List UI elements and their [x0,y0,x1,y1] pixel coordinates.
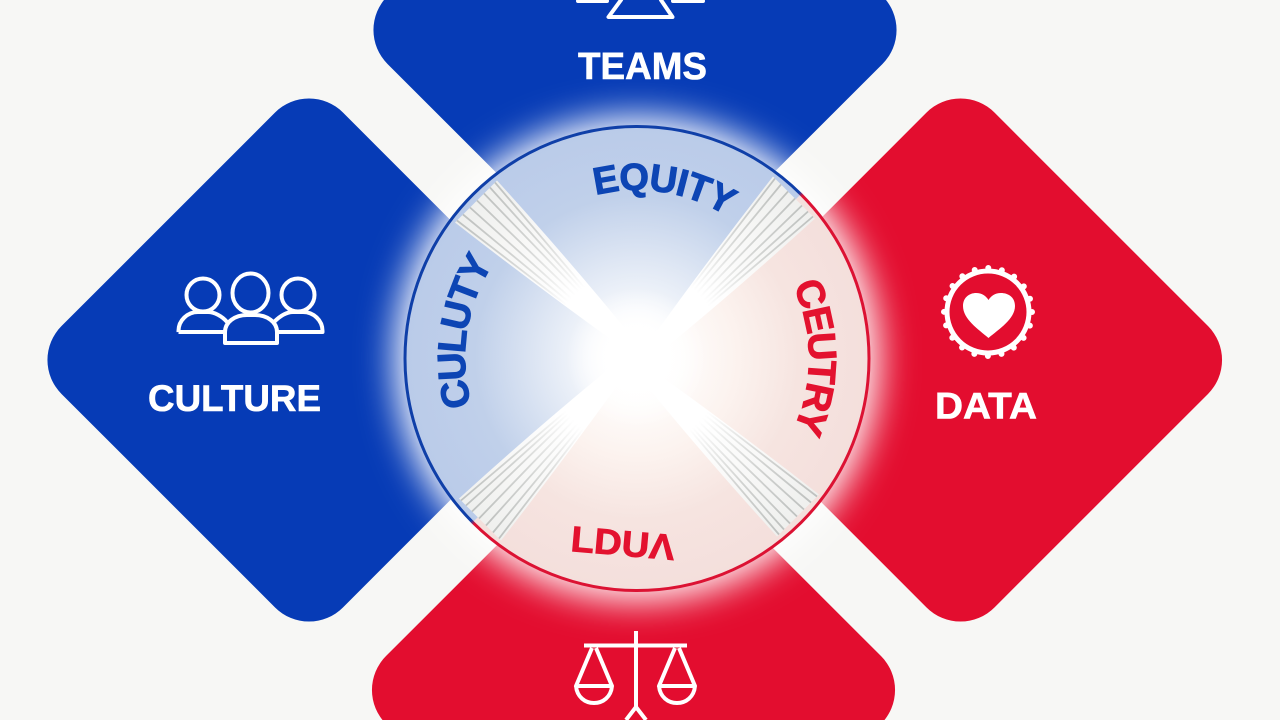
icon: people group [178,274,323,343]
hub label: culuty: CULUTY [437,250,489,408]
hub label: ldua: LDUΛ [569,518,676,568]
hub circle [404,125,870,592]
heading: data: DATA [935,386,1037,426]
panel: teams diamond [354,0,916,311]
panel: legal diamond [352,409,915,720]
hub ring [405,126,869,590]
hub label: equity: EQUITY [592,163,740,212]
white glow around hub [395,116,879,600]
heading: culture: CULTURE [148,378,321,419]
panel: data diamond [679,79,1242,641]
striped wedge: upper left [455,180,643,352]
heading: teams: TEAMS [578,46,707,88]
striped wedge: lower left [459,352,631,540]
hub tinted quadrants [408,130,868,589]
icon: heart badge [944,268,1032,356]
icon: teams (cropped) [578,0,703,17]
hub label: ceutry: CEUTRY [796,280,837,440]
panel: culture diamond [28,79,590,641]
striped wedge: lower right [631,364,819,536]
striped wedge: upper right [643,176,815,364]
hub centre glow [567,288,707,428]
icon: balance scales [576,631,695,720]
